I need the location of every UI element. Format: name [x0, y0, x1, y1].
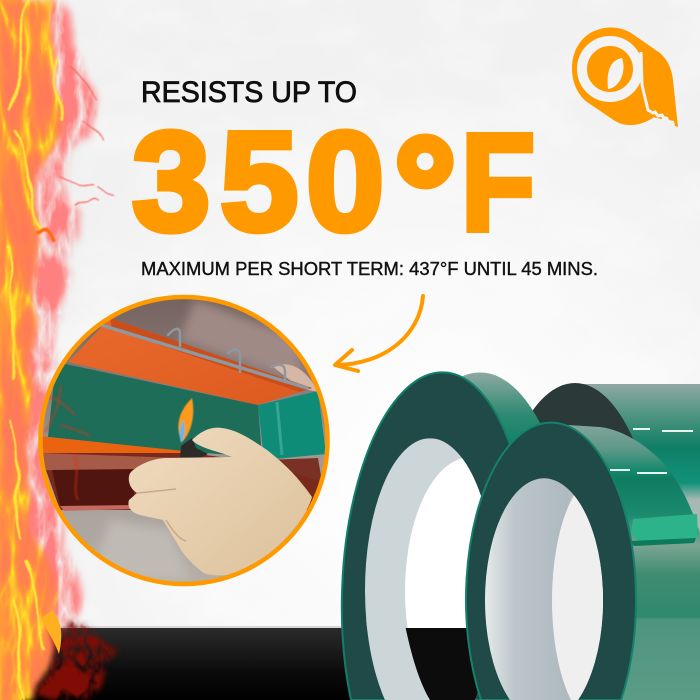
- orange beam: [68, 318, 312, 405]
- headline temperature: [132, 102, 535, 280]
- left roll see-through opening: [366, 458, 481, 700]
- green tape flap: [631, 514, 698, 543]
- hand: [128, 428, 312, 575]
- flame pink fringe: [0, 0, 92, 628]
- green tape rolls: [342, 372, 700, 700]
- front roll hole: [485, 478, 603, 700]
- icon: tape roll logo: [572, 28, 678, 127]
- flame yellow and red wisps: [6, 0, 116, 700]
- flame tongue crossing the floor line: [42, 610, 61, 654]
- heading: resists up to: RESISTS UP TO: [141, 76, 357, 109]
- flame dark embers on floor: [0, 628, 112, 700]
- flame reflection on photo edge: [45, 385, 90, 500]
- front roll face: [466, 423, 636, 700]
- subheading: short term limit: MAXIMUM PER SHORT TERM: 437°F UNTIL 45 MINS.: [141, 258, 598, 279]
- flame orange and yellow core: [0, 0, 60, 700]
- lighter: [180, 438, 208, 458]
- back left roll: [340, 371, 540, 700]
- headline temperature: °: [394, 106, 456, 280]
- wire rack rail and hooks: [101, 325, 307, 388]
- back right roll: [490, 383, 700, 700]
- photo blurred backdrop: [99, 300, 307, 578]
- green tape roll in photo: [258, 391, 326, 460]
- photo circle orange ring: [40, 297, 328, 584]
- green taped panel: [48, 362, 262, 457]
- background hand: [272, 364, 318, 392]
- lighter flame: [178, 398, 193, 443]
- front roll: [466, 423, 700, 700]
- front roll opening: [552, 496, 603, 700]
- flame base glow: [0, 0, 22, 700]
- photo circle: lighter test on tape: [38, 297, 328, 584]
- orange lower strip: [42, 436, 181, 453]
- arrow to photo: [335, 296, 423, 371]
- black floor band: [0, 626, 700, 700]
- fire border: [0, 0, 116, 700]
- headline temperature: 350: [132, 102, 384, 260]
- left roll hole: [365, 438, 495, 700]
- headline temperature: F: [461, 106, 535, 260]
